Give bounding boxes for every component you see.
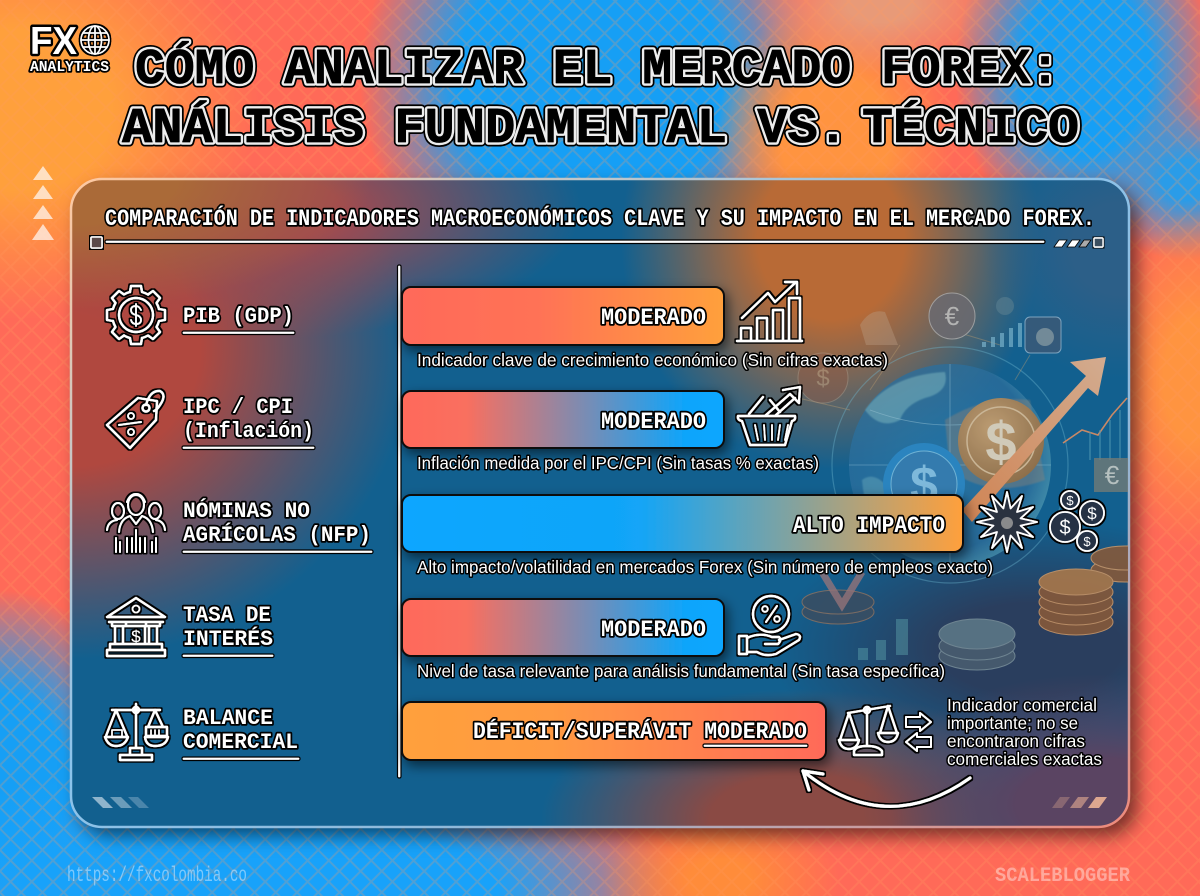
title: TÉCNICO: [862, 100, 1079, 158]
row: IPC: [107, 387, 819, 473]
icon: rising bar chart: [737, 282, 802, 341]
icon: stacked up triangles: [32, 166, 54, 240]
vertical axis line: [398, 265, 401, 778]
rising arrow: [962, 357, 1106, 522]
callout text: [947, 695, 1102, 769]
bar label: DÉFICIT/SUPERÁVIT MODERADO: [473, 718, 807, 745]
bar: moderado: [402, 391, 724, 448]
row: IPC: (Inflación): [183, 419, 314, 444]
bar: deficit / superavit: [402, 702, 826, 760]
icon: balance with cargo: [105, 704, 168, 760]
euro coin: [929, 293, 975, 339]
panel: main comparison: [71, 179, 1159, 827]
icon: exchange arrows: [906, 713, 931, 751]
icon: basket with arrow: [738, 387, 800, 445]
description: Inflación medida por el IPC/CPI (Sin tasas % exactas): [417, 453, 819, 473]
bar label: MODERADO: [601, 617, 706, 643]
callout text: Indicador comercial: [947, 695, 1097, 715]
underline: [182, 654, 274, 658]
moderado underline: [703, 744, 808, 748]
small coin: [996, 297, 1014, 315]
row: Balance comercial: COMERCIAL: [183, 730, 298, 755]
description: Alto impacto/volatilidad en mercados Forex (Sin número de empleos exacto): [417, 557, 993, 577]
footer: brand: SCALEBLOGGER: [995, 865, 1130, 888]
logo: FX Analytics: [30, 20, 109, 76]
divider with end markers: [91, 237, 1103, 248]
label: TASA DE: [183, 603, 271, 628]
icon: coins: $: [1066, 493, 1074, 508]
icon: balance scale: [839, 706, 898, 755]
underline: [182, 757, 300, 760]
icon: globe: [81, 26, 109, 54]
bar label: ALTO IMPACTO: [793, 513, 945, 539]
gold coin: [958, 398, 1044, 484]
small trend line: [1063, 398, 1127, 443]
bar label: MODERADO: [601, 305, 706, 331]
dim dollar coin: [798, 353, 848, 403]
title: [122, 41, 1079, 158]
description: Indicador clave de crecimiento económico (Sin cifras exactas): [417, 350, 888, 370]
row: NFP: [107, 491, 1104, 577]
icon: hand with percent: [739, 596, 800, 655]
footer: url: https://fxcolombia.co: [67, 865, 247, 888]
row: Balance comercial: [105, 695, 1102, 806]
icon: coins: $: [1059, 517, 1071, 539]
title: TÉCNICO: [862, 100, 1079, 158]
illustration: globe, coins and rising arrow: [798, 292, 1128, 670]
icon: price tag: [107, 391, 164, 448]
icon: bank: $: [131, 627, 141, 646]
row: Tasa de interés: INTERÉS: [183, 626, 273, 652]
description: Nivel de tasa relevante para análisis fundamental (Sin tasa específica): [417, 661, 945, 681]
bar: alto impacto: [402, 495, 963, 552]
euro box: [1094, 458, 1130, 492]
icon: workers group: [107, 494, 165, 552]
label: BALANCE: [183, 706, 273, 731]
title: ANÁLISIS FUNDAMENTAL VS.: [122, 100, 848, 158]
title: ANÁLISIS FUNDAMENTAL VS.: [122, 100, 848, 158]
icon: gear dollar: [107, 286, 165, 344]
coin stack: left: [802, 590, 874, 624]
dim document icon: [860, 311, 898, 345]
mini bar chart: [982, 323, 1022, 347]
v mark: [822, 572, 862, 605]
underline: [182, 331, 295, 334]
row: PIB: [107, 282, 888, 370]
arrow: curved back to bar: [803, 771, 970, 806]
gold coin: $: [985, 410, 1017, 473]
title: CÓMO ANALIZAR EL MERCADO FOREX:: [135, 41, 1060, 99]
underline: [182, 550, 373, 554]
callout text: importante; no se: [947, 713, 1078, 733]
callout text: encontraron cifras: [947, 731, 1085, 751]
icon: coins: $: [1087, 504, 1097, 523]
icon: corner stripes right: [1052, 797, 1107, 808]
title: TÉCNICO: [862, 100, 1079, 158]
title: CÓMO ANALIZAR EL MERCADO FOREX:: [135, 41, 1060, 99]
icon: burst: [977, 492, 1037, 552]
logo: FX Analytics: ANALYTICS: [30, 59, 109, 76]
icon: corner stripes left: [92, 797, 149, 808]
title: ANÁLISIS FUNDAMENTAL VS.: [122, 100, 848, 158]
bar: moderado: [402, 599, 724, 656]
icon: coins: $: [1083, 534, 1091, 549]
icon: coins: [1050, 491, 1104, 551]
blue coin: [883, 443, 965, 498]
callout text: comerciales exactas: [947, 749, 1102, 769]
blue coin: $: [910, 457, 938, 513]
coin stack: grey: [939, 619, 1015, 670]
dim dollar coin: $: [816, 365, 830, 392]
label: NÓMINAS NO: [183, 498, 310, 524]
coin stack: right: [1038, 546, 1128, 636]
bar: moderado: [402, 287, 724, 345]
euro coin: €: [945, 301, 960, 331]
bar label: MODERADO: [601, 409, 706, 435]
label: IPC / CPI: [183, 395, 293, 420]
icon: bank: [107, 598, 165, 656]
logo: FX Analytics: FX: [30, 20, 77, 63]
row: NFP: AGRÍCOLAS (NFP): [183, 522, 371, 548]
title: CÓMO ANALIZAR EL MERCADO FOREX:: [135, 41, 1060, 99]
label: PIB (GDP): [183, 304, 294, 329]
row: Tasa de interés: [107, 596, 945, 681]
screen widget: [1025, 317, 1061, 353]
mini pillars: [858, 619, 908, 660]
underline: [182, 446, 315, 450]
euro box: €: [1105, 460, 1120, 490]
panel background: [71, 179, 1129, 827]
